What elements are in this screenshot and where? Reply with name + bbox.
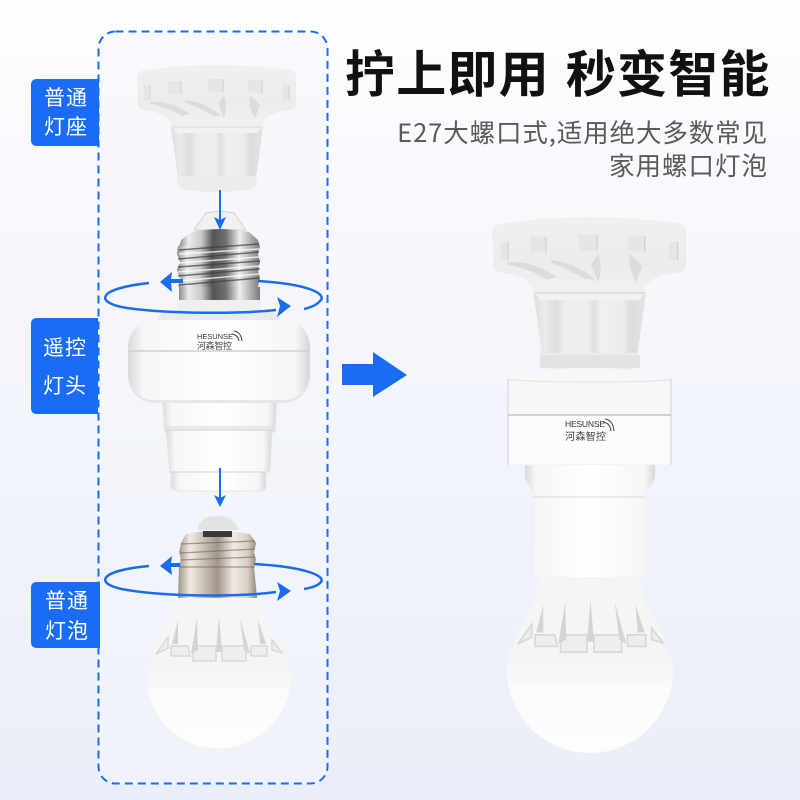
brand logo (197, 331, 242, 351)
lamp socket (left) (137, 65, 296, 192)
brand logo: HESUNSE (197, 332, 233, 341)
subtitle: E27大螺口式,适用绝大多数常见 (397, 113, 768, 150)
assembled collar (540, 355, 640, 368)
label: 普通灯座: 灯座 (44, 116, 88, 139)
label: 普通灯座 (31, 79, 99, 146)
adapter screw cap (177, 212, 261, 314)
label: 遥控灯头 (31, 318, 98, 414)
assembled brand logo: 河森智控 (565, 430, 606, 443)
exploded assembly panel (dashed frame) (98, 32, 328, 784)
subtitle: 家用螺口灯泡 (609, 146, 768, 183)
rotation ring: lower (105, 556, 322, 601)
title: 拧上即用 秒变智能 (345, 47, 771, 103)
label: 普通灯泡: 普通 (45, 590, 89, 613)
rotation ring: upper (105, 272, 322, 317)
assembled socket (492, 217, 686, 372)
assembled adapter (508, 368, 671, 577)
brand logo: 河森智控 (197, 340, 232, 351)
arrow: socket to screw (214, 190, 226, 230)
arrow: assembled result (342, 352, 407, 397)
label: 普通灯泡: 灯泡 (45, 620, 89, 643)
arrow: adapter to bulb (214, 468, 226, 507)
assembled bulb (507, 577, 673, 753)
label: 遥控灯头: 灯头 (43, 375, 87, 398)
light bulb (left) (146, 516, 290, 748)
assembled brand logo: HESUNSE (565, 419, 605, 429)
label: 普通灯座: 普通 (44, 87, 88, 110)
label: 普通灯泡 (31, 582, 100, 648)
remote-control adapter (left) (128, 312, 310, 491)
subtitle (397, 113, 768, 183)
assembled brand logo (565, 419, 614, 443)
assembled lamp (right) (492, 217, 686, 753)
label: 遥控灯头: 遥控 (43, 337, 87, 360)
